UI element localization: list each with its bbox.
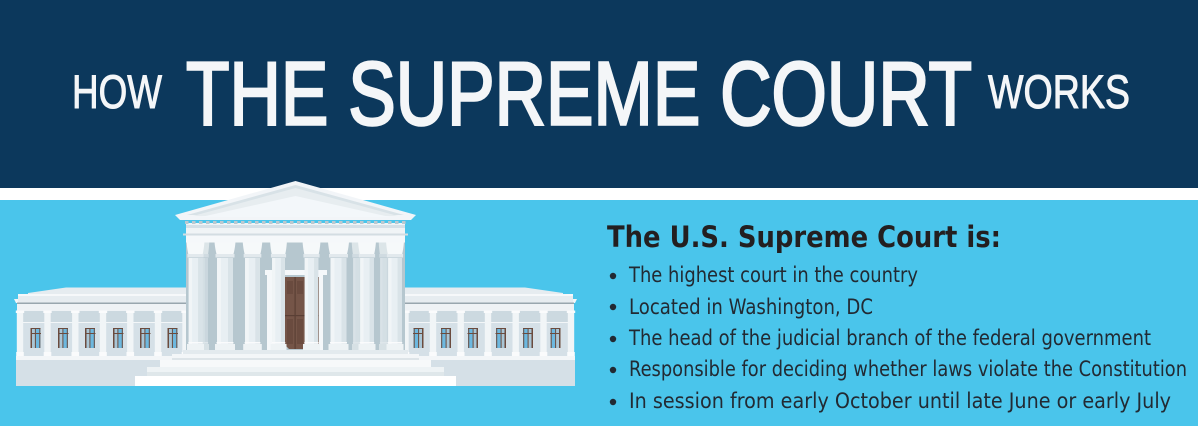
white divider band bbox=[0, 188, 1198, 200]
door frame bbox=[265, 270, 327, 350]
portico back wall bbox=[186, 235, 405, 351]
entablature bbox=[183, 223, 408, 242]
illustration: Supreme Court building bbox=[14, 181, 577, 386]
bullet list: Located in Washington, DC bbox=[629, 295, 873, 320]
left wing of building bbox=[14, 288, 191, 386]
dentil row bbox=[185, 221, 406, 224]
heading: The U.S. Supreme Court is: bbox=[607, 220, 1001, 254]
title: HOW bbox=[72, 65, 162, 118]
pediment bbox=[175, 181, 416, 220]
bullet list: The highest court in the country bbox=[628, 263, 918, 288]
portico columns bbox=[187, 242, 404, 350]
bronze door bbox=[285, 277, 319, 349]
text block: Supreme Court facts bbox=[607, 220, 1187, 414]
header banner bbox=[0, 0, 1198, 188]
bullet list bbox=[610, 263, 1187, 414]
title: WORKS bbox=[988, 65, 1130, 118]
right wing of building bbox=[400, 288, 577, 386]
steps bbox=[135, 350, 456, 386]
title: THE SUPREME COURT bbox=[186, 44, 972, 144]
light blue panel bbox=[0, 200, 1198, 426]
